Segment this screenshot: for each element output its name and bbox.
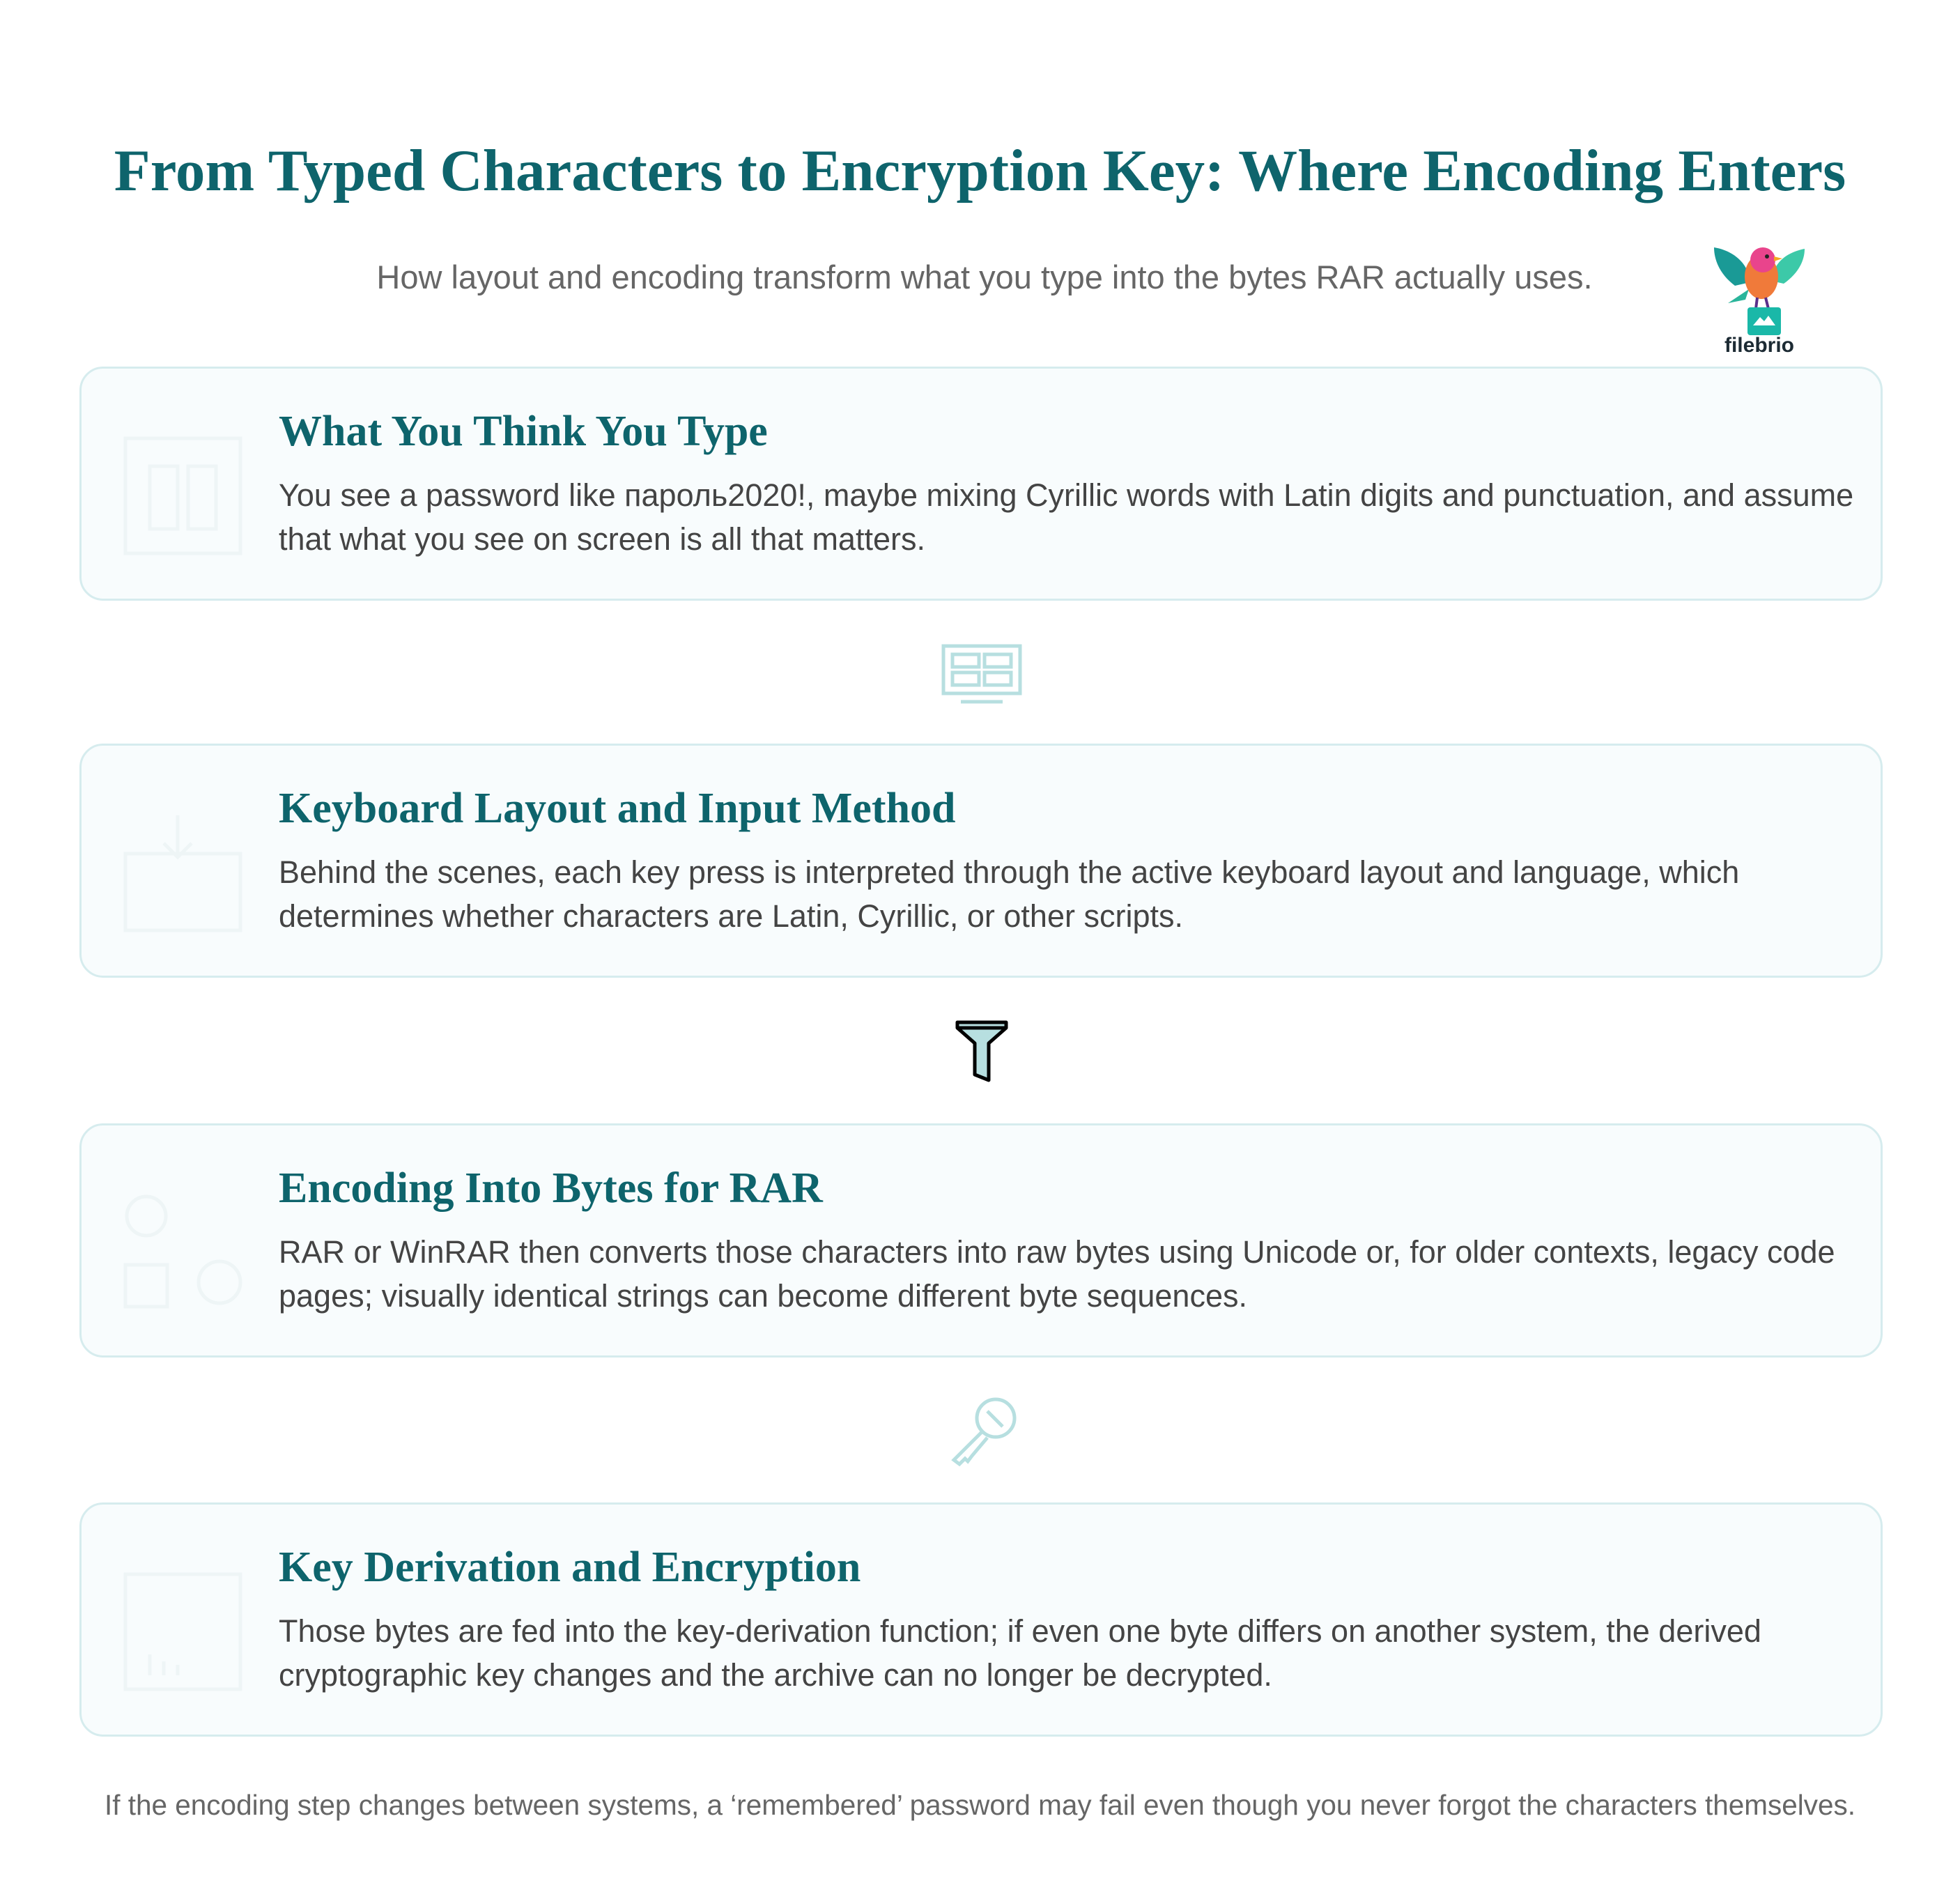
body text: You see a password like пароль2020!, maybe mixing Cyrillic words with Latin digits and punctuation, and assume that what you see on screen is all that matters. [279, 477, 1853, 557]
icon: nodes [124, 1194, 242, 1309]
panel: what you think you type [79, 367, 1883, 601]
footer note: If the encoding step changes between systems, a ‘remembered’ password may fail even though you never forgot the characters themselves. [105, 1789, 1855, 1821]
logo: filebrio [1714, 247, 1805, 355]
panel: key derivation [79, 1502, 1883, 1737]
heading: Key Derivation and Encryption [279, 1544, 861, 1591]
body text: Behind the scenes, each key press is interpreted through the active keyboard layout and language, which determines whether characters are Latin, Cyrillic, or other scripts. [279, 854, 1739, 934]
panel: keyboard layout [79, 744, 1883, 978]
title: From Typed Characters to Encryption Key: Where Encoding Enters [114, 138, 1846, 203]
icon: keypad [124, 436, 242, 555]
arrow icon: funnel [956, 1020, 1008, 1082]
panel: encoding into bytes [79, 1123, 1883, 1358]
icon: chip [124, 1572, 242, 1691]
icon: layout [124, 815, 242, 932]
body text: Those bytes are fed into the key-derivation function; if even one byte differs on another system, the derived cryptographic key changes and the archive can no longer be decrypted. [279, 1613, 1761, 1693]
heading: Keyboard Layout and Input Method [279, 785, 956, 832]
subtitle: How layout and encoding transform what you type into the bytes RAR actually uses. [376, 259, 1593, 295]
arrow icon: key [951, 1398, 1016, 1466]
heading: Encoding Into Bytes for RAR [279, 1164, 823, 1212]
body text: RAR or WinRAR then converts those characters into raw bytes using Unicode or, for older contexts, legacy code pages; visually identical strings can become different byte sequences. [279, 1234, 1835, 1314]
arrow icon: monitor [942, 644, 1021, 704]
heading: What You Think You Type [279, 408, 768, 455]
